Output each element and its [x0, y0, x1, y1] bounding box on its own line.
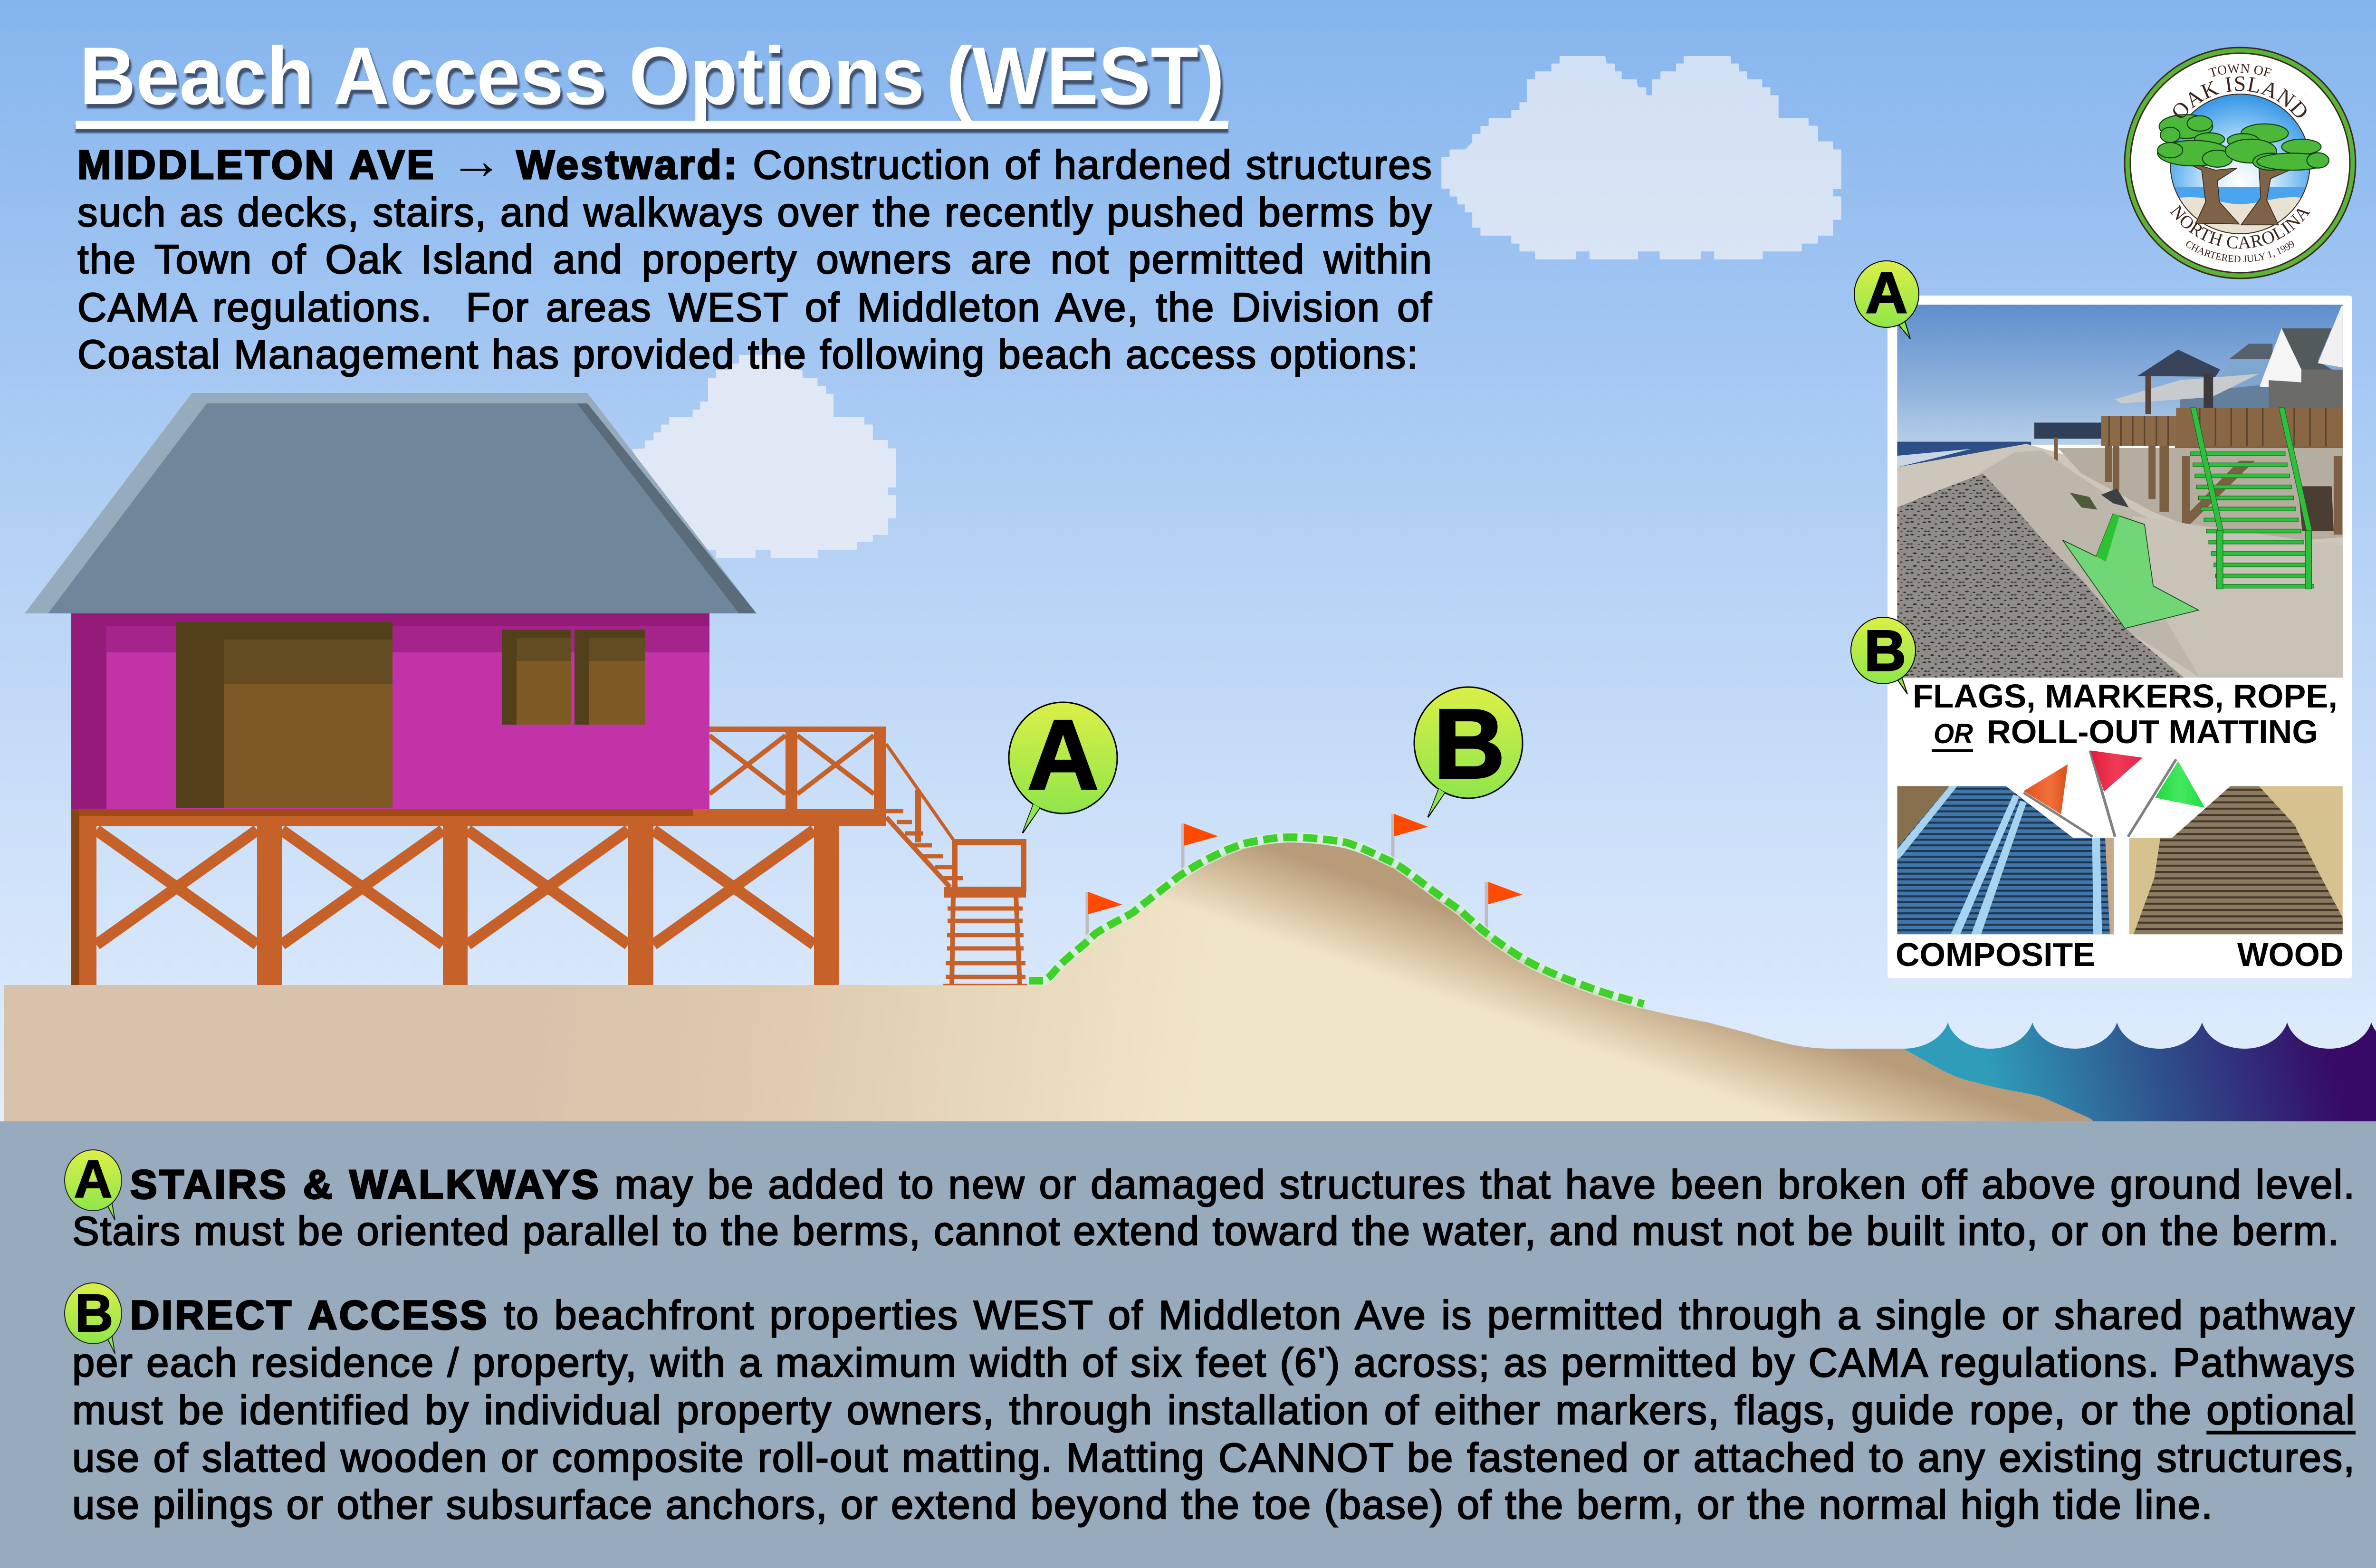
green stairs overlay — [2191, 408, 2314, 589]
small cloud behind house — [633, 355, 895, 557]
badge B on photo — [1851, 617, 1916, 694]
speckled sand berm — [1897, 474, 2184, 678]
deck railing — [709, 727, 886, 826]
intro text block — [77, 142, 1433, 379]
callout badge A on diagram: A — [1027, 700, 1099, 810]
photo panel: stairs and berm — [1887, 296, 2352, 978]
decks — [2034, 422, 2101, 439]
flags along berm — [1087, 814, 1523, 943]
item B description: must be identified by individual property owners, through installation of either markers, flags, guide rope, or the optional — [72, 1388, 2356, 1433]
dashed green pathway over berm — [1029, 837, 1644, 1004]
callout badge A on diagram — [1009, 700, 1117, 833]
panel captions: COMPOSITE — [1896, 936, 2095, 973]
stilts and cross braces — [96, 830, 814, 945]
stairs — [886, 744, 1027, 985]
item A description: STAIRS & WALKWAYS may be added to new or damaged structures that have been broken off above ground level. — [130, 1162, 2356, 1207]
flag: orange — [2023, 765, 2093, 837]
panel captions — [1896, 678, 2344, 973]
panel captions: FLAGS, MARKERS, ROPE, — [1913, 678, 2338, 715]
roof — [25, 393, 757, 613]
title: Beach Access Options (WEST) — [79, 30, 1225, 122]
panel captions: ROLL-OUT MATTING — [1987, 713, 2318, 750]
panel captions: WOOD — [2237, 936, 2344, 973]
houses background — [2229, 344, 2272, 359]
Town of Oak Island seal: TOWN OF — [2207, 61, 2273, 81]
green arrow overlay — [2063, 514, 2199, 629]
flag: green — [2128, 759, 2205, 837]
flag: red — [2090, 750, 2143, 837]
item B description: use of slatted wooden or composite roll-out matting. Matting CANNOT be fastened or attached to any existing structures, — [72, 1435, 2356, 1481]
wood matting photo — [2129, 786, 2343, 934]
intro text block: CAMA regulations. For areas WEST of Middleton Ave, the Division of — [77, 285, 1433, 330]
sand berm — [4, 842, 2095, 1122]
badge A on photo — [1854, 260, 1919, 339]
badge B in text panel — [65, 1283, 122, 1354]
intro text block: such as decks, stairs, and walkways over the recently pushed berms by — [77, 190, 1433, 235]
Town of Oak Island seal: OAK ISLAND — [2166, 71, 2314, 124]
intro text block: the Town of Oak Island and property owners are not permitted within — [77, 237, 1433, 282]
intro text block: Coastal Management has provided the following beach access options: — [77, 332, 1419, 377]
large cloud — [1443, 57, 1840, 259]
Town of Oak Island seal: CHARTERED JULY 1, 1999 — [2184, 238, 2297, 265]
item A description: Stairs must be oriented parallel to the berms, cannot extend toward the water, and must not be built into, or on the berm. — [72, 1209, 2340, 1254]
matting photos — [1897, 750, 2343, 934]
badge A on photo: A — [1866, 260, 1907, 325]
badge A in text panel: A — [74, 1149, 112, 1209]
badge B in text panel: B — [75, 1283, 113, 1343]
door — [176, 622, 393, 808]
Town of Oak Island seal: NORTH CAROLINA — [2166, 202, 2314, 253]
item B description: use pilings or other subsurface anchors, or extend beyond the toe (base) of the berm, or the normal high tide line. — [72, 1482, 2213, 1528]
water with scalloped waves — [1903, 1023, 2376, 1122]
composite matting photo — [1897, 786, 2114, 934]
sky background — [0, 0, 2376, 1122]
callout badge B on diagram — [1414, 687, 1523, 817]
item B description — [72, 1292, 2356, 1530]
badge A in text panel — [65, 1149, 122, 1220]
intro text block: MIDDLETON AVE → Westward: Construction of hardened structures — [77, 131, 1433, 190]
photo of berm and houses — [1897, 305, 2343, 678]
panel captions: OR — [1934, 718, 1973, 749]
item B description: per each residence / property, with a maximum width of six feet (6') across; as permitted by CAMA regulations. Pathways — [72, 1340, 2356, 1386]
badge B on photo: B — [1864, 618, 1906, 683]
walls — [71, 613, 709, 809]
item B description: DIRECT ACCESS to beachfront properties WEST of Middleton Ave is permitted through a single or shared pathway — [130, 1293, 2356, 1338]
house on stilts — [25, 393, 1027, 985]
item A description — [72, 1161, 2356, 1256]
callout badge B on diagram: B — [1434, 689, 1505, 799]
second berm — [1979, 450, 2343, 678]
Town of Oak Island seal — [2125, 48, 2356, 278]
bottom text panel — [0, 1121, 2376, 1568]
windows — [502, 630, 645, 725]
